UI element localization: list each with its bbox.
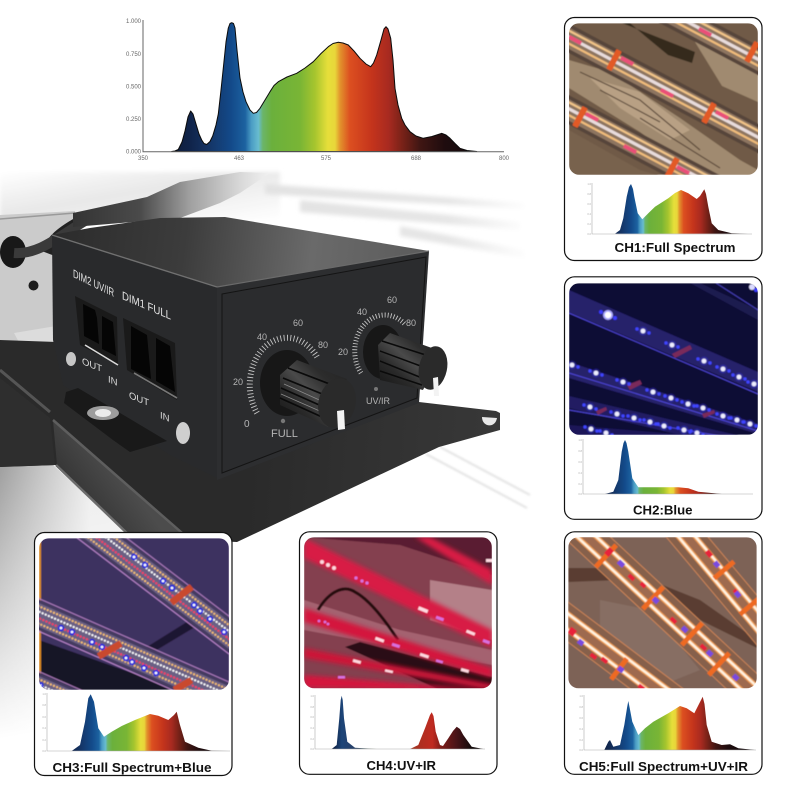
- port legends: IN: [108, 374, 117, 389]
- main chart axes: [143, 20, 504, 152]
- CH1 spectrum chart: 0.6: [587, 202, 592, 206]
- main spectrum chart: [126, 19, 510, 162]
- CH3 spectrum chart: 1.0: [42, 692, 47, 696]
- CH5 spectrum chart: 0.0: [579, 748, 584, 752]
- CH1 photo: [569, 23, 758, 175]
- CH4 spectrum chart: 0.0: [310, 747, 315, 751]
- CH2 spectrum chart: 0.2: [578, 482, 583, 486]
- CH5 spectrum chart: 1.0: [579, 694, 584, 698]
- FULL dial scale: 40: [257, 332, 267, 342]
- y axis labels: 0.250: [126, 117, 142, 123]
- CH4 spectrum chart: 0.2: [310, 737, 315, 741]
- port legends: OUT: [129, 390, 149, 409]
- knob: FULL: [260, 350, 361, 432]
- CH2 photo: [569, 283, 758, 435]
- CH5 spectrum chart: 0.2: [579, 738, 584, 742]
- CH3 spectrum chart: 0.0: [42, 749, 47, 753]
- panel: CH5 full spectrum + UV + IR: [564, 531, 763, 775]
- CH4 spectrum chart: 1.0: [310, 694, 315, 698]
- CH3 label: CH3:Full Spectrum+Blue: [52, 760, 212, 775]
- CH2 label: CH2:Blue: [633, 502, 692, 518]
- CH5 spectrum chart: [579, 694, 756, 752]
- RJ ports right: [123, 318, 177, 400]
- CH5 spectrum chart: 0.4: [579, 727, 584, 731]
- x axis labels: 800: [499, 156, 510, 162]
- port legends: DIM2 UV/IR: [73, 267, 114, 300]
- CH2 spectrum chart: 0.6: [578, 460, 583, 464]
- port legends: DIM1 FULL: [122, 288, 171, 323]
- x axis labels: 463: [234, 156, 245, 162]
- CH4 spectrum chart: [310, 694, 485, 751]
- box right dial face: [217, 251, 429, 480]
- faded background surfaces: [0, 172, 530, 740]
- RJ ports left: [75, 296, 118, 365]
- panel: CH3 full spectrum + blue: [34, 532, 233, 776]
- CH1 spectrum chart: 1.0: [587, 182, 592, 186]
- CH2 spectrum chart: 0.0: [578, 492, 583, 496]
- main spectrum filled curve: [172, 23, 477, 152]
- CH4 spectrum chart: 0.4: [310, 726, 315, 730]
- CH3 photo: [39, 538, 229, 690]
- UV/IR dial scale: 40: [357, 307, 367, 317]
- CH4 spectrum chart: 0.6: [310, 715, 315, 719]
- controller product photo: [0, 172, 530, 740]
- CH1 label: CH1:Full Spectrum: [614, 240, 736, 255]
- x axis labels: 575: [321, 156, 332, 162]
- UV/IR dial scale: 20: [338, 347, 348, 357]
- screws and bracket: [64, 352, 190, 452]
- UV/IR dial scale: UV/IR: [366, 396, 391, 406]
- FULL dial scale: FULL: [271, 428, 298, 440]
- CH3 spectrum chart: [42, 692, 230, 753]
- port legends: [73, 267, 171, 425]
- CH3 spectrum chart: 0.2: [42, 738, 47, 742]
- mounting plate: [0, 340, 500, 542]
- CH1 spectrum chart: 0.8: [587, 192, 592, 196]
- CH4 spectrum chart: 0.8: [310, 705, 315, 709]
- y axis labels: 1.000: [126, 19, 142, 25]
- port legends: IN: [160, 410, 169, 425]
- panel: CH4 UV + IR: [300, 532, 497, 774]
- panel: CH2 blue: [564, 277, 762, 519]
- FULL dial scale: [233, 318, 328, 440]
- CH2 spectrum chart: 0.4: [578, 471, 583, 475]
- CH4 label: CH4:UV+IR: [366, 758, 437, 773]
- panel: CH1 full spectrum: [564, 16, 763, 262]
- y axis labels: [126, 19, 142, 156]
- CH5 photo: [568, 537, 757, 688]
- FULL dial scale: 0: [244, 419, 250, 430]
- FULL dial scale: 20: [233, 377, 243, 387]
- FULL dial scale: 60: [293, 318, 303, 328]
- CH1 spectrum chart: [587, 182, 752, 236]
- CH2 spectrum chart: 1.0: [578, 438, 583, 442]
- CH2 spectrum chart: [578, 438, 753, 496]
- CH3 spectrum chart: 0.6: [42, 715, 47, 719]
- CH2 spectrum chart: 0.8: [578, 449, 583, 453]
- UV/IR dial scale: [338, 295, 416, 406]
- y axis labels: 0.000: [126, 150, 142, 156]
- UV/IR dial scale: 60: [387, 295, 397, 305]
- CH3 spectrum chart: 0.8: [42, 703, 47, 707]
- CH1 spectrum chart: 0.0: [587, 232, 592, 236]
- CH1 spectrum chart: 0.4: [587, 212, 592, 216]
- CH5 spectrum chart: 0.6: [579, 716, 584, 720]
- CH5 label: CH5:Full Spectrum+UV+IR: [579, 759, 749, 774]
- cable and ribbon: [0, 172, 270, 268]
- y axis labels: 0.750: [126, 52, 142, 58]
- x axis labels: [138, 156, 510, 162]
- CH5 spectrum chart: 0.8: [579, 705, 584, 709]
- port legends: OUT: [82, 356, 102, 375]
- CH4 photo: [304, 537, 492, 690]
- box front connector face: [52, 235, 217, 478]
- CH1 spectrum chart: 0.2: [587, 222, 592, 226]
- y axis labels: 0.500: [126, 84, 142, 90]
- FULL dial scale: 80: [318, 340, 328, 350]
- UV/IR dial scale: 80: [406, 318, 416, 328]
- box top face: [52, 217, 429, 287]
- x axis labels: 688: [411, 156, 422, 162]
- x axis labels: 350: [138, 156, 149, 162]
- knob: UV/IR: [363, 325, 451, 396]
- CH3 spectrum chart: 0.4: [42, 726, 47, 730]
